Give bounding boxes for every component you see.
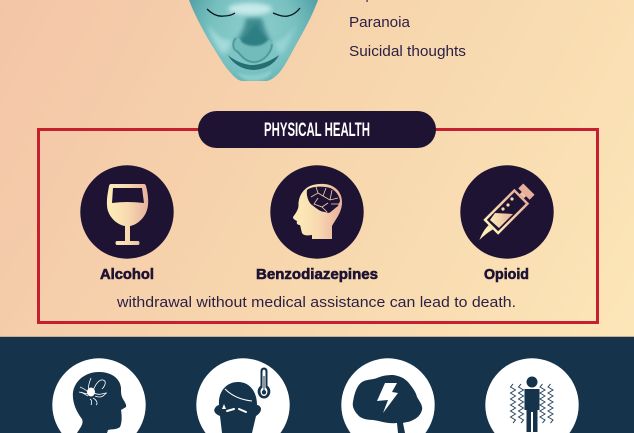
text block: mental health symptoms [349,0,466,60]
syringe liquid [490,213,513,228]
syringe body [483,189,529,235]
icon: shaking person [485,358,579,433]
eyes [207,9,235,16]
icon: syringe [460,165,554,259]
text block: mental health symptoms: Paranoia [349,14,411,31]
mouth [228,55,279,70]
syringe needle [477,225,493,241]
icon: brain with lightning bolt [341,358,435,433]
text block: mental health symptoms: Suicidal thoughts [349,43,466,60]
label: alcohol: Alcohol [100,266,154,283]
icon: head with brain [270,165,364,259]
highlight: right cheek [274,30,294,54]
heading: physical health: PHYSICAL HEALTH [264,119,370,141]
panel: physical health frame [38,130,598,322]
icon: spider in head [52,358,146,433]
label: opioid: Opioid [484,266,529,283]
background [0,0,634,337]
chin [238,71,272,81]
icon: wine glass [80,165,174,259]
label: benzodiazepines: Benzodiazepines [256,266,378,283]
illustration: teal face [185,0,321,82]
heading: physical health [198,111,436,148]
icon: fever head with thermometer [196,358,290,433]
highlight: forehead [228,3,272,15]
text: withdrawal warning: withdrawal without medical assistance can lead to death. [116,295,516,311]
panel: symptoms band [0,336,634,433]
nose [234,38,271,61]
syringe neck and plunger cap [520,191,527,198]
shadow: nose bridge [234,18,272,44]
highlight: left cheek [208,24,232,54]
